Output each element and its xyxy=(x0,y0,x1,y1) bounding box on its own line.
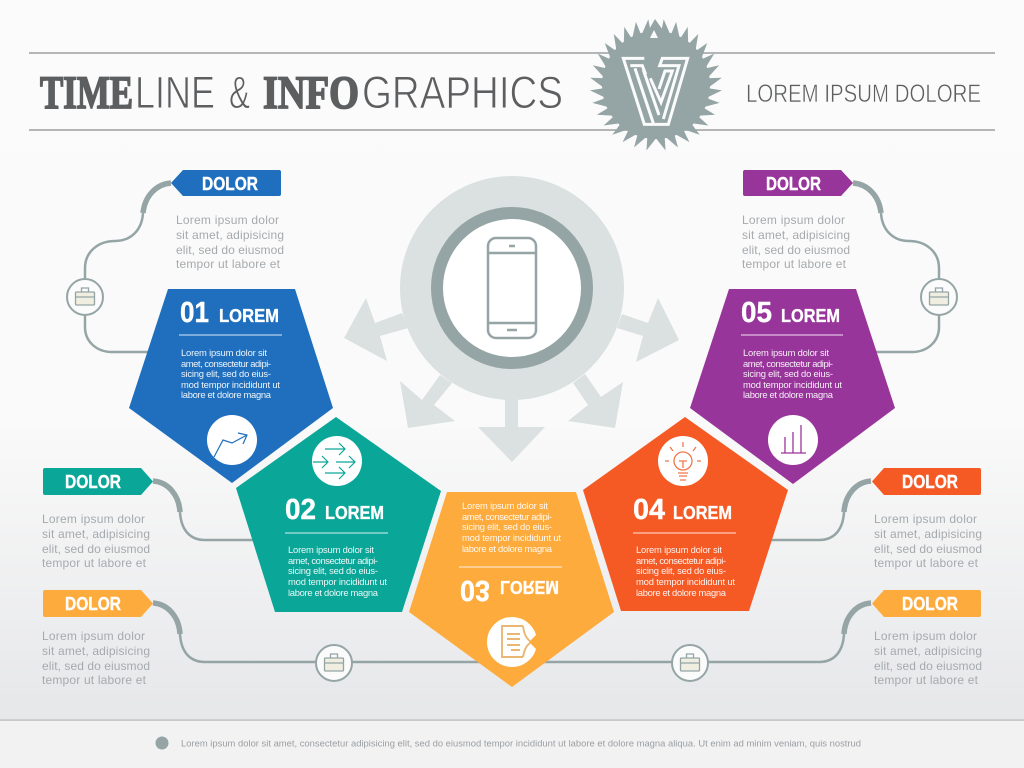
panel: 04 orange pentagon: amet, consectetur adipi- xyxy=(636,555,726,566)
text block: bottom left: sit amet, adipisicing xyxy=(42,644,150,658)
tag: top left xyxy=(171,170,281,196)
panel: 03 amber pentagon: sicing elit, sed do eius- xyxy=(462,521,552,532)
panel: 04 orange pentagon: 04 xyxy=(633,494,665,526)
panel: 05 purple pentagon: sicing elit, sed do eius- xyxy=(743,368,833,379)
tag: bottom left: DOLOR xyxy=(65,594,121,614)
text block: middle right: Lorem ipsum dolor xyxy=(874,512,977,526)
text block: middle right: sit amet, adipisicing xyxy=(874,527,982,541)
tag: bottom left xyxy=(43,590,153,617)
panel: 02 teal pentagon: sicing elit, sed do eius- xyxy=(288,565,378,576)
text block: top left xyxy=(176,213,284,271)
connector: item 5 xyxy=(853,183,939,352)
tag: middle left xyxy=(43,468,153,495)
connector: item 1 xyxy=(85,183,171,352)
panel: 05 purple pentagon: mod tempor incididunt ut xyxy=(743,379,842,390)
connector: item 2 xyxy=(153,481,255,540)
panel: 01 blue pentagon: sicing elit, sed do eius- xyxy=(181,368,271,379)
panel: 02 teal pentagon xyxy=(236,417,441,612)
panel: 04 orange pentagon xyxy=(583,417,788,611)
panel: 05 purple pentagon: labore et dolore magna xyxy=(743,389,834,400)
connector: item 3 right xyxy=(540,603,871,662)
text block: bottom right: Lorem ipsum dolor xyxy=(874,629,977,643)
title: & xyxy=(229,67,250,118)
briefcase icon bottom right xyxy=(672,645,708,681)
tag: top right xyxy=(743,170,853,196)
text block: top right: tempor ut labore et xyxy=(742,257,847,271)
text block: bottom left: Lorem ipsum dolor xyxy=(42,629,145,643)
text block: top right xyxy=(742,213,850,271)
panel: 03 amber pentagon: labore et dolore magna xyxy=(462,543,553,554)
text block: top right: elit, sed do eiusmod xyxy=(742,243,850,257)
text block: bottom right xyxy=(874,629,982,687)
central hub with arrows xyxy=(344,176,679,462)
panel: 05 purple pentagon: amet, consectetur adipi- xyxy=(743,358,833,369)
panel: 02 teal pentagon: 02 xyxy=(285,494,316,526)
title: LINE xyxy=(135,67,215,118)
panel: 03 amber pentagon: LOREM xyxy=(500,577,559,597)
briefcase icon top right xyxy=(921,279,957,315)
panel: 03 amber pentagon xyxy=(409,492,614,687)
panel: 04 orange pentagon: sicing elit, sed do eius- xyxy=(636,565,726,576)
text block: middle left: tempor ut labore et xyxy=(42,556,147,570)
panel: 04 orange pentagon: Lorem ipsum dolor sit xyxy=(636,544,722,555)
connector: item 4 xyxy=(769,481,871,540)
panel: 02 teal pentagon: amet, consectetur adipi- xyxy=(288,555,378,566)
panel: 01 blue pentagon: labore et dolore magna xyxy=(181,389,272,400)
text block: top right: Lorem ipsum dolor xyxy=(742,213,845,227)
logo badge xyxy=(590,19,722,151)
panel: 01 blue pentagon: LOREM xyxy=(219,306,279,326)
panel: 01 blue pentagon: 01 xyxy=(180,297,209,329)
panel: 02 teal pentagon: Lorem ipsum dolor sit xyxy=(288,544,374,555)
text block: top right: sit amet, adipisicing xyxy=(742,228,850,242)
panel: 04 orange pentagon: labore et dolore magna xyxy=(636,587,727,598)
tag: top left: DOLOR xyxy=(202,174,258,194)
tag: bottom right xyxy=(872,590,981,617)
text block: middle left xyxy=(42,512,150,570)
panel: 03 amber pentagon: amet, consectetur adipi- xyxy=(462,511,552,522)
icon: smartphone xyxy=(488,238,536,338)
title: INFO xyxy=(263,67,359,119)
connector: item 3 left xyxy=(153,603,485,662)
panel: 02 teal pentagon: LOREM xyxy=(325,503,384,523)
panel: 05 purple pentagon xyxy=(690,289,895,484)
text block: bottom right: sit amet, adipisicing xyxy=(874,644,982,658)
panel: 01 blue pentagon: mod tempor incididunt ut xyxy=(181,379,280,390)
text block: top left: Lorem ipsum dolor xyxy=(176,213,279,227)
panel: 02 teal pentagon: mod tempor incididunt ut xyxy=(288,576,387,587)
text block: top left: sit amet, adipisicing xyxy=(176,228,284,242)
panel: 03 amber pentagon: 03 xyxy=(460,574,490,606)
text block: middle right: elit, sed do eiusmod xyxy=(874,542,982,556)
tag: middle right xyxy=(872,468,981,495)
text block: middle left: sit amet, adipisicing xyxy=(42,527,150,541)
panel: 01 blue pentagon: amet, consectetur adipi- xyxy=(181,358,271,369)
tag: middle right: DOLOR xyxy=(902,472,958,492)
footer: Lorem ipsum dolor sit amet, consectetur adipisicing elit, sed do eiusmod tempor incididunt ut labore et dolore magna aliqua. Ut enim ad minim veniam, quis nostrud xyxy=(181,738,861,750)
briefcase icon top left xyxy=(67,279,103,315)
title: GRAPHICS xyxy=(362,67,563,118)
panel: 01 blue pentagon xyxy=(129,289,333,483)
text block: bottom right: tempor ut labore et xyxy=(874,673,979,687)
panel: 03 amber pentagon: mod tempor incididunt ut xyxy=(462,532,561,543)
panel: 05 purple pentagon: Lorem ipsum dolor sit xyxy=(743,347,829,358)
header rule lines xyxy=(29,53,995,130)
text block: middle left: Lorem ipsum dolor xyxy=(42,512,145,526)
tag: middle left: DOLOR xyxy=(65,472,121,492)
title xyxy=(40,67,563,119)
title: TIME xyxy=(40,67,133,119)
text block: bottom left xyxy=(42,629,150,687)
briefcase icon bottom left xyxy=(316,645,352,681)
text block: middle right xyxy=(874,512,982,570)
panel: 04 orange pentagon: LOREM xyxy=(673,503,732,523)
footer xyxy=(0,720,1024,750)
text block: bottom left: tempor ut labore et xyxy=(42,673,147,687)
tag: bottom right: DOLOR xyxy=(902,594,958,614)
panel: 01 blue pentagon: Lorem ipsum dolor sit xyxy=(181,347,267,358)
panel: 04 orange pentagon: mod tempor incididunt ut xyxy=(636,576,735,587)
panel: 02 teal pentagon: labore et dolore magna xyxy=(288,587,379,598)
panel: 03 amber pentagon: Lorem ipsum dolor sit xyxy=(462,500,548,511)
text block: middle right: tempor ut labore et xyxy=(874,556,979,570)
text block: middle left: elit, sed do eiusmod xyxy=(42,542,150,556)
panel: 05 purple pentagon: 05 xyxy=(741,297,772,329)
text block: top left: tempor ut labore et xyxy=(176,257,281,271)
text block: top left: elit, sed do eiusmod xyxy=(176,243,284,257)
panel: 05 purple pentagon: LOREM xyxy=(781,306,840,326)
tag: top right: DOLOR xyxy=(766,174,821,194)
text block: bottom left: elit, sed do eiusmod xyxy=(42,659,150,673)
text block: bottom right: elit, sed do eiusmod xyxy=(874,659,982,673)
